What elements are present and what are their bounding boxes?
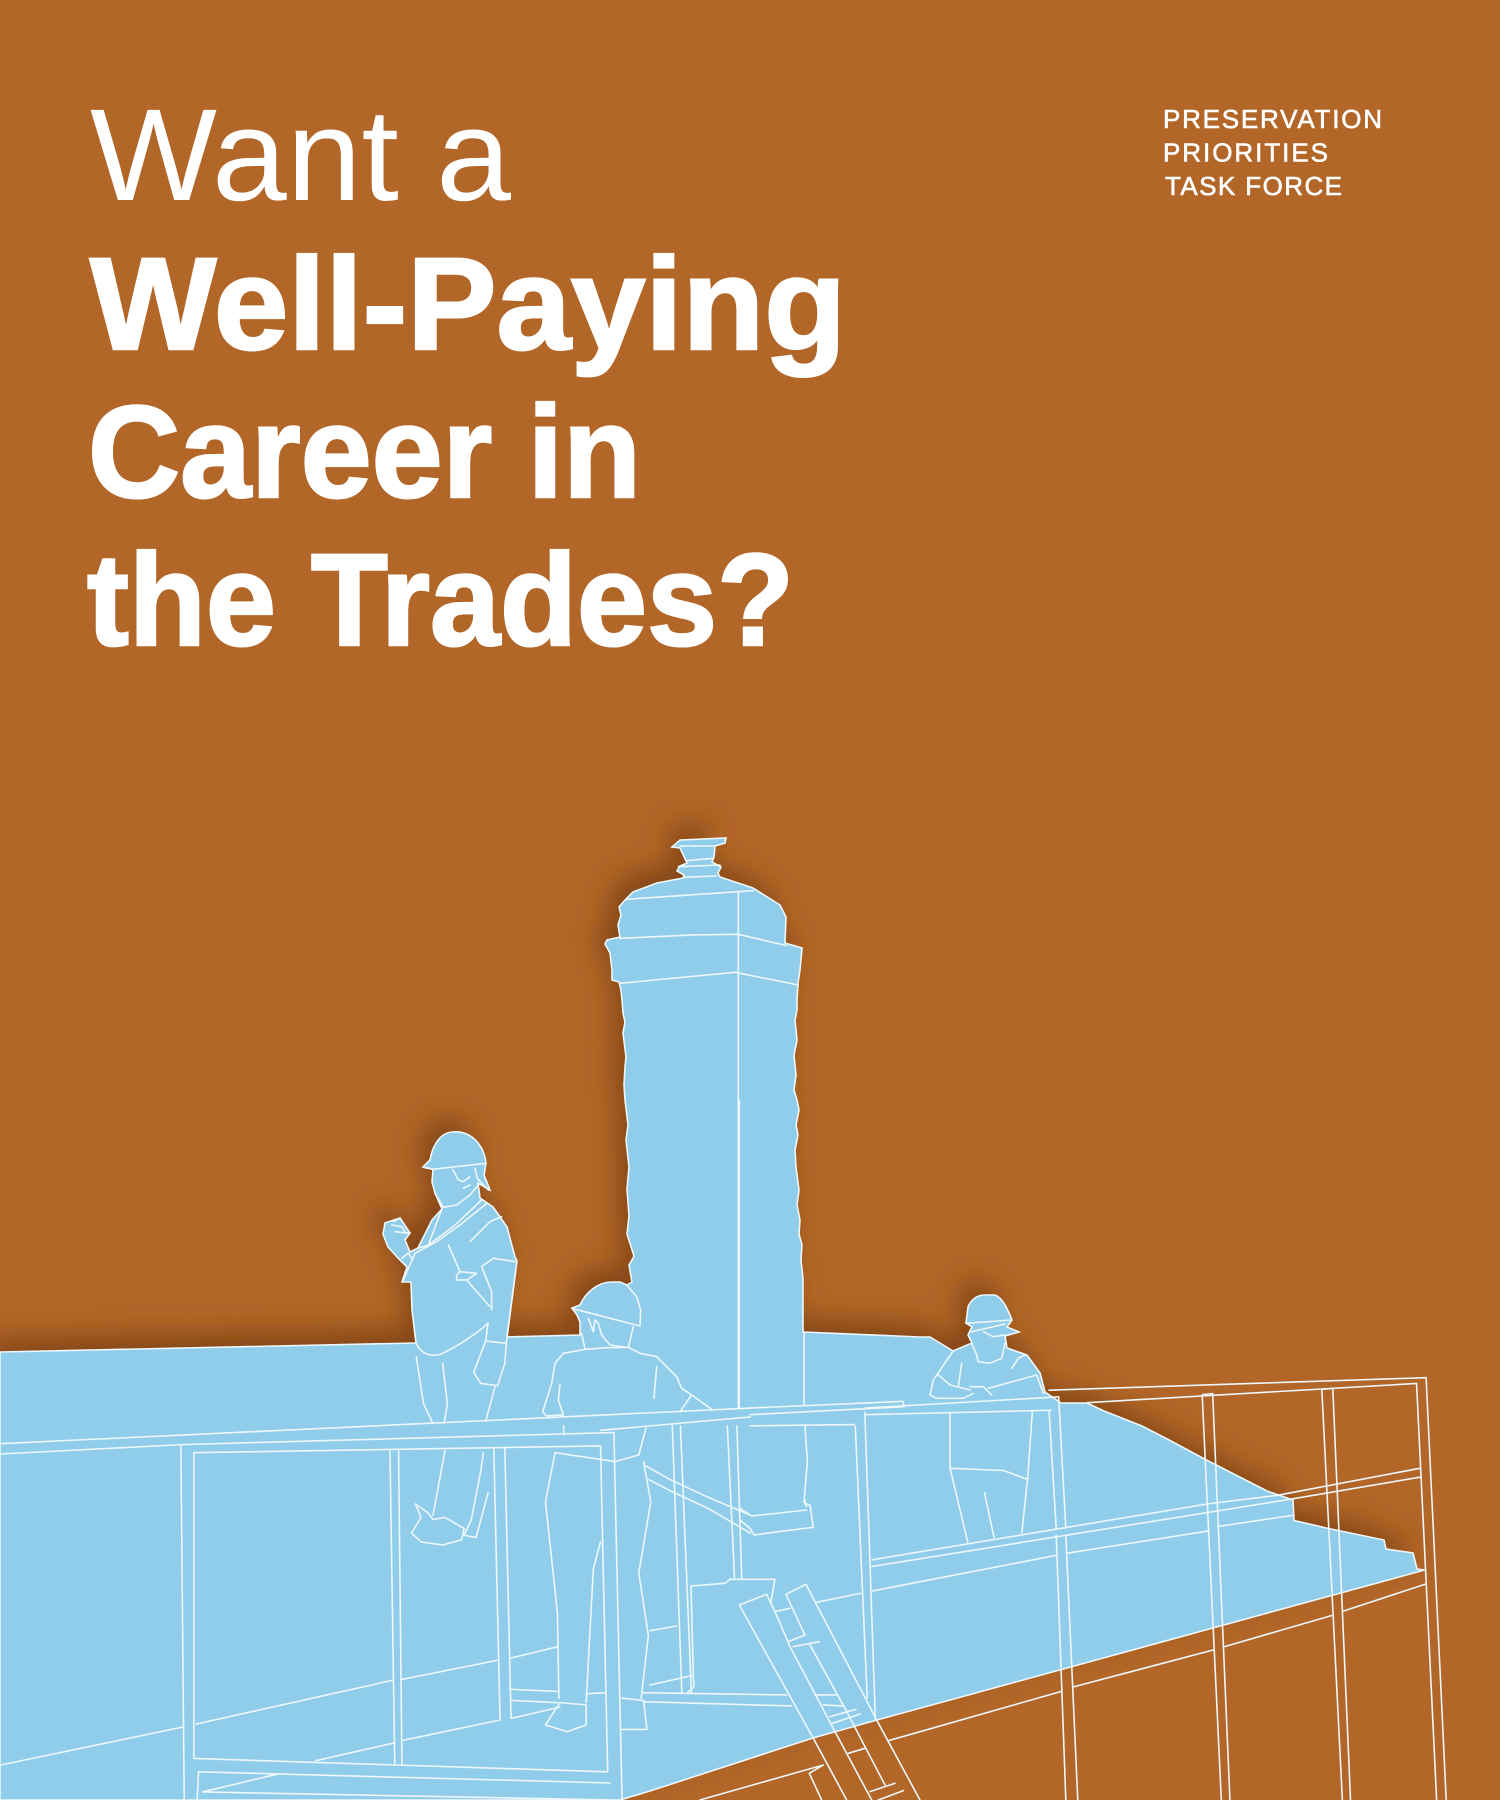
scaffold: right section <box>750 1332 1446 1800</box>
worker two upper body <box>543 1285 712 1416</box>
worker one: standing with harness <box>392 1163 516 1545</box>
ladder and chimney base <box>643 1500 920 1800</box>
silhouette shadow <box>0 824 1415 1786</box>
logo text: Preservation Priorities Task Force: PRIORITIES <box>1163 138 1328 168</box>
chimney base <box>740 1500 813 1535</box>
logo text: Preservation Priorities Task Force: TASK FORCE <box>1165 171 1342 201</box>
lower beams <box>700 1765 823 1800</box>
title line: the Trades?: the Trades? <box>87 526 794 673</box>
logo text: Preservation Priorities Task Force: PRESERVATION <box>1163 104 1382 134</box>
title line: Want a: Want a <box>90 81 511 228</box>
title line: Well-Paying: Well-Paying <box>90 230 846 377</box>
scaffold: left section <box>0 1100 750 1800</box>
worker one lower body <box>412 1270 516 1545</box>
worker two lower body <box>545 1426 651 1732</box>
title line: Career in: Career in <box>88 378 641 525</box>
worker two: back turned <box>543 1285 712 1732</box>
ladder rails <box>739 1584 920 1800</box>
logo text: Preservation Priorities Task Force <box>1163 104 1382 201</box>
title <box>87 81 846 673</box>
blue rooftop silhouette <box>0 838 1425 1800</box>
worker three lower body <box>950 1412 1032 1542</box>
worker one upper body <box>392 1163 515 1310</box>
ladder rungs <box>815 1695 903 1800</box>
worker three: leaning on railing <box>930 1320 1043 1542</box>
worker three upper body <box>930 1320 1043 1398</box>
chimney detail lines <box>620 846 798 1408</box>
crate behind ladder <box>643 1579 792 1706</box>
